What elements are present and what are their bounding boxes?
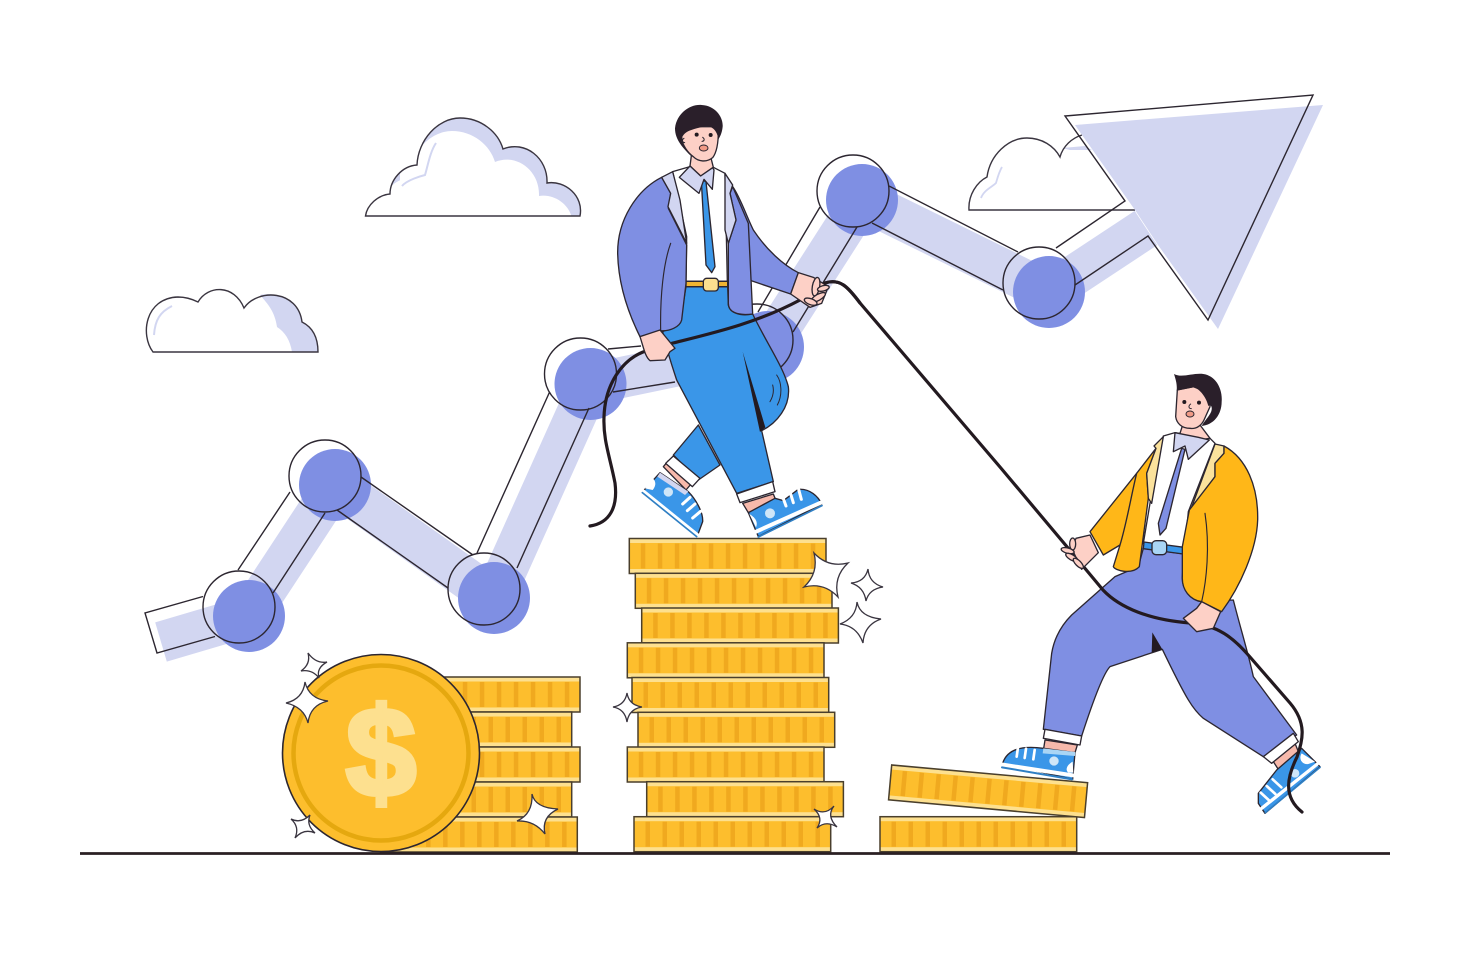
man 1: walking on coins, blue suit xyxy=(618,105,822,537)
man 2 shirt, tie and belt xyxy=(1143,433,1215,555)
man 1 shirt, tie and belt xyxy=(673,167,728,291)
man 2 cuffs and ankles xyxy=(1043,729,1299,769)
man 1 front ankle and cuff xyxy=(737,482,776,513)
coin stack: right, with tilted coin xyxy=(880,765,1088,852)
man 1 left shoe xyxy=(642,473,703,537)
arrow outline xyxy=(145,95,1313,653)
big dollar coin xyxy=(282,654,480,852)
rope over man 1 grip xyxy=(825,282,860,303)
man 1 jacket xyxy=(618,172,798,337)
cloud: behind arrow xyxy=(969,135,1135,210)
data point outlines xyxy=(203,155,1075,643)
ground line xyxy=(80,852,1390,855)
man 1 trousers xyxy=(663,287,789,493)
man 2 hands xyxy=(1061,535,1221,632)
man 2 left shoe xyxy=(1002,747,1075,779)
arrow shadow band xyxy=(161,200,1146,642)
man 2 right shoe xyxy=(1258,748,1320,813)
man 2: pulling rope, yellow jacket xyxy=(1002,374,1320,813)
man 2 trousers xyxy=(1043,548,1297,757)
man 1 collar xyxy=(679,166,714,193)
coin stack: tall centre xyxy=(627,538,843,852)
man 1 right shoe xyxy=(748,489,822,537)
big dollar coin: $ xyxy=(346,682,416,823)
line chart: rising arrow xyxy=(145,95,1323,653)
man 2 collar xyxy=(1173,433,1209,459)
arrow head shadow xyxy=(1075,105,1323,329)
cloud: left xyxy=(146,290,318,352)
man 2 jacket xyxy=(1090,437,1258,612)
man 1 neck and face xyxy=(675,105,723,176)
man 1 hands xyxy=(640,273,830,361)
rope xyxy=(590,282,1302,812)
man 2 neck and face xyxy=(1174,374,1222,442)
cloud: top centre xyxy=(364,117,582,217)
coin stack: left xyxy=(375,677,580,852)
data point fills xyxy=(213,164,1085,652)
man 1 back leg xyxy=(663,425,720,490)
sparkles xyxy=(286,553,883,838)
